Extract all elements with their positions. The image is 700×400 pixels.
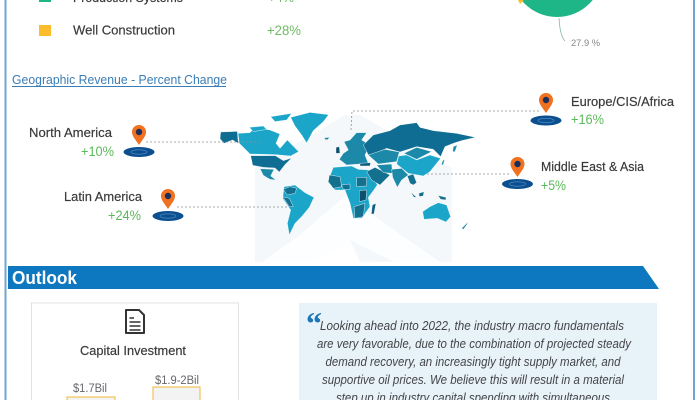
central asia <box>368 149 399 164</box>
quote text: supportive oil prices. We believe this will result in a material <box>322 373 625 387</box>
quote panel <box>299 303 657 400</box>
usa <box>251 156 292 172</box>
outlook banner <box>8 266 659 289</box>
label: Europe: Europe/CIS/Africa <box>571 95 674 109</box>
label: Europe <box>571 95 674 127</box>
africa <box>328 166 377 218</box>
label: North America: North America <box>29 126 112 140</box>
legend: segment revenue change: +28% <box>267 23 301 38</box>
legend: segment revenue change: Well Construction <box>73 24 175 38</box>
greenland <box>291 112 329 143</box>
bar: 2022: $1.9-2Bil <box>155 375 199 387</box>
connector lines <box>146 111 539 207</box>
capital investment card: Capital Investment <box>80 344 187 358</box>
label: Latin America: +24% <box>108 208 141 223</box>
label: Middle East: Middle East & Asia <box>541 160 644 174</box>
mexico <box>260 169 276 180</box>
japan <box>441 145 457 165</box>
label: North America: +10% <box>81 144 114 159</box>
canada <box>238 127 299 156</box>
europe <box>339 133 370 165</box>
middle east <box>367 167 390 185</box>
capital investment card <box>32 303 238 400</box>
pin: Europe <box>530 93 562 126</box>
bar: 2021 <box>67 383 115 400</box>
icon: document <box>126 310 144 333</box>
quote text: Looking ahead into 2022, the industry macro fundamentals <box>320 319 624 333</box>
legend: segment revenue change <box>39 0 301 38</box>
label: Middle East: +5% <box>541 178 566 193</box>
quote text: demand recovery, an increasingly tight supply market, and <box>326 355 621 369</box>
watermark logo <box>255 115 452 262</box>
india <box>392 168 408 187</box>
quote text: are very favorable, due to the combination of projected steady <box>317 337 632 351</box>
south america <box>283 185 314 235</box>
russia <box>363 123 476 157</box>
new zealand <box>462 222 468 229</box>
pin: North America <box>124 125 154 157</box>
pin: Latin America <box>152 189 184 221</box>
iceland <box>324 137 329 140</box>
quote text <box>317 319 632 400</box>
outlook banner: Outlook <box>12 268 78 288</box>
label: Europe: +16% <box>571 112 604 127</box>
pie chart: 27.9 % <box>571 38 601 49</box>
label: North America <box>29 126 114 159</box>
heading: geographic revenue: Geographic Revenue - Percent Change <box>12 73 227 87</box>
china <box>397 155 441 176</box>
label: Latin America: Latin America <box>64 190 142 204</box>
pin: Middle East <box>502 157 533 189</box>
label: Middle East <box>541 160 644 193</box>
label: Latin America <box>64 190 142 223</box>
alaska <box>220 131 238 143</box>
australia <box>423 203 451 222</box>
pie chart <box>511 0 603 49</box>
icon: quote mark: “ <box>306 305 322 341</box>
world map <box>220 112 476 235</box>
bar: 2022 <box>153 375 200 400</box>
southeast asia <box>407 174 417 185</box>
bar: 2021: $1.7Bil <box>73 383 107 395</box>
